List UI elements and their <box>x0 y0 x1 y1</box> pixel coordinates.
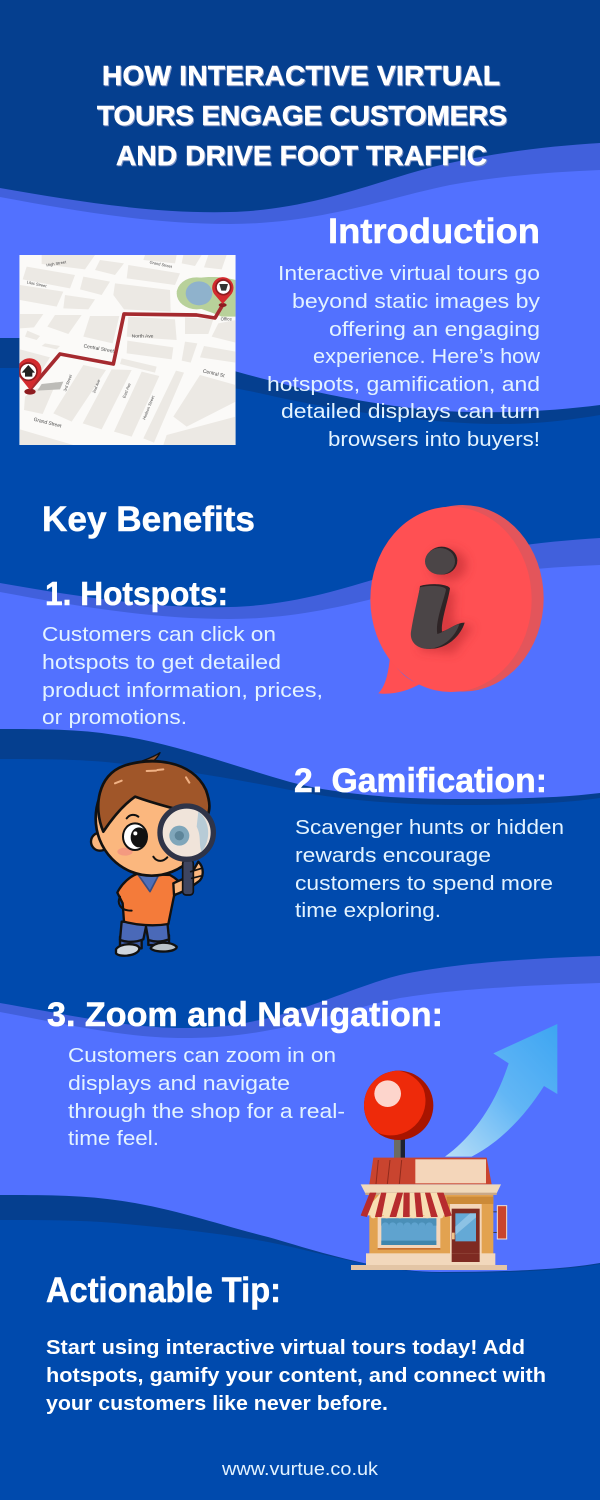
title: AND DRIVE FOOT TRAFFIC <box>116 140 487 171</box>
map image: 2nd Ave <box>91 378 102 394</box>
map image: 3rd Street <box>62 373 73 392</box>
text: gamification body <box>295 816 564 922</box>
intro text: experience. Here’s how <box>313 345 540 368</box>
arrow <box>445 1024 557 1157</box>
map image: North Ave <box>132 333 154 339</box>
heading: actionable tip: Actionable Tip: <box>46 1271 281 1310</box>
intro text: offering an engaging <box>329 318 540 341</box>
text: actionable tip body: your customers like never before. <box>46 1393 388 1415</box>
intro text: Interactive virtual tours go <box>278 262 540 285</box>
map pin <box>364 1071 433 1158</box>
title: TOURS ENGAGE CUSTOMERS <box>97 100 507 131</box>
intro text: hotspots, gamification, and <box>267 373 540 396</box>
intro text: detailed displays can turn <box>281 400 540 423</box>
intro text: browsers into buyers! <box>328 428 540 451</box>
map image: Hudson Street <box>141 394 156 420</box>
map image: Central St <box>202 368 226 379</box>
map image: Grand Street <box>149 259 173 269</box>
text: zoom and navigation body: displays and navigate <box>68 1072 290 1095</box>
text: actionable tip body: Start using interactive virtual tours today! Add <box>46 1337 525 1359</box>
intro text: beyond static images by <box>292 290 541 313</box>
map image <box>17 255 236 445</box>
section: hotspots <box>42 575 323 729</box>
map image: Lilac Street <box>26 279 48 289</box>
heading: zoom and navigation: 3. Zoom and Navigation: <box>47 996 443 1034</box>
text: gamification body: time exploring. <box>295 899 441 922</box>
text: zoom and navigation body: time feel. <box>68 1127 159 1150</box>
map image: Central Street <box>83 343 115 355</box>
text: hotspots body: or promotions. <box>42 706 187 729</box>
text: hotspots body <box>42 623 323 729</box>
heading: introduction: Introduction <box>328 212 540 251</box>
heading: hotspots: 1. Hotspots: <box>45 575 228 612</box>
section: zoom and navigation <box>47 996 443 1150</box>
map image: Office <box>221 317 232 322</box>
title: HOW INTERACTIVE VIRTUAL <box>102 60 500 91</box>
map image: High Street <box>46 259 67 268</box>
text: gamification body: Scavenger hunts or hidden <box>295 816 564 839</box>
text: zoom and navigation body <box>68 1044 345 1150</box>
map image: Grand Street <box>33 417 63 430</box>
footer url: www.vurtue.co.uk <box>221 1459 379 1479</box>
text: zoom and navigation body: Customers can zoom in on <box>68 1044 336 1067</box>
intro text <box>267 262 541 451</box>
text: hotspots body: Customers can click on <box>42 623 276 646</box>
title <box>97 60 507 171</box>
icon: info speech bubble <box>370 505 544 694</box>
map image: East Ave <box>121 382 132 399</box>
text: hotspots body: hotspots to get detailed <box>42 651 281 674</box>
text: zoom and navigation body: through the shop for a real- <box>68 1100 345 1123</box>
text: gamification body: rewards encourage <box>295 844 491 867</box>
shop building <box>351 1158 507 1270</box>
text: hotspots body: product information, prices, <box>42 679 323 702</box>
text: actionable tip body <box>46 1337 546 1415</box>
icon: shop with map pin and growth arrow <box>351 1024 557 1270</box>
text: gamification body: customers to spend more <box>295 872 553 895</box>
icon: boy with magnifying glass <box>91 753 213 956</box>
heading: key benefits: Key Benefits <box>42 500 255 539</box>
text: actionable tip body: hotspots, gamify your content, and connect with <box>46 1365 546 1387</box>
heading: gamification: 2. Gamification: <box>294 762 547 800</box>
section: gamification <box>294 762 564 922</box>
